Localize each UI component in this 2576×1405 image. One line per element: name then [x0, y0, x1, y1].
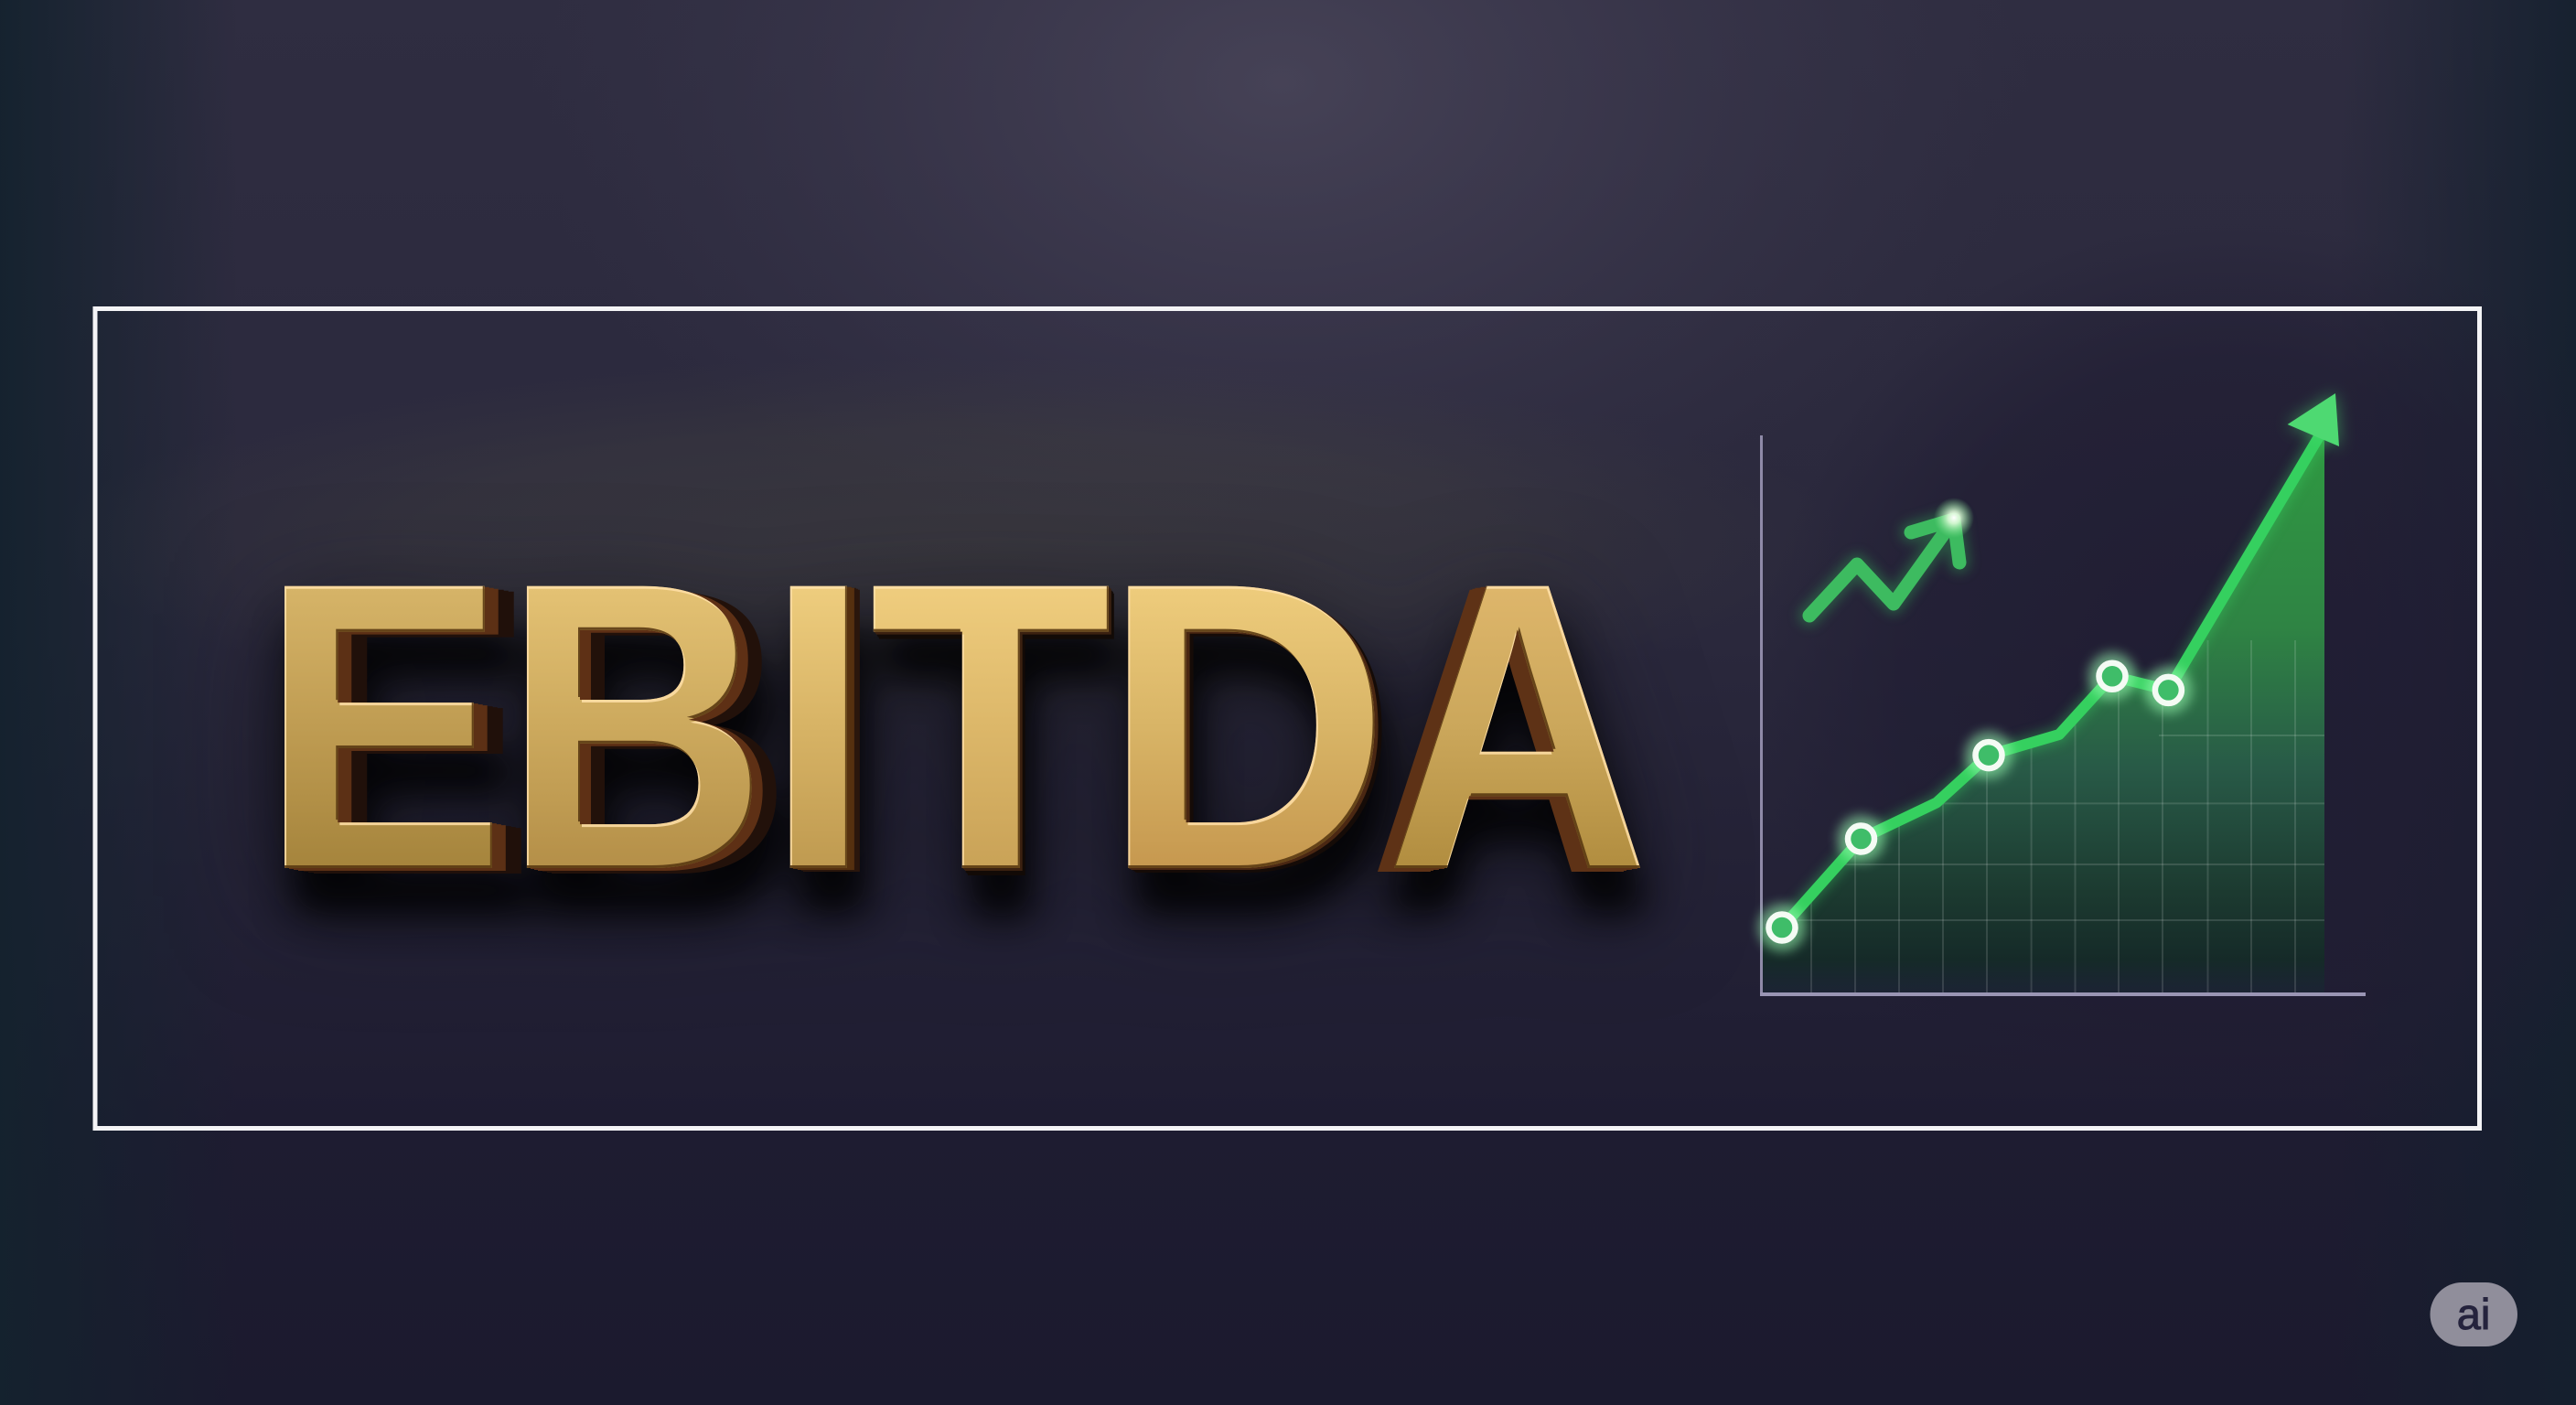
area fill under line [1763, 429, 2324, 994]
letter A: A [1385, 497, 1650, 955]
ai badge: ai [2457, 1290, 2490, 1338]
arrowhead [2288, 393, 2339, 446]
data point 1 [1758, 904, 1806, 951]
frame panel [95, 309, 2479, 1129]
data point 2 [1837, 815, 1884, 863]
data point 4 [2088, 652, 2136, 700]
growth line [1782, 429, 2324, 928]
chart grid [1782, 640, 2324, 994]
data point 3 [1965, 732, 2012, 779]
data point 5 [2144, 666, 2192, 713]
letter T: T [869, 497, 1112, 955]
y axis [1760, 435, 1763, 994]
growth chart [1758, 393, 2366, 994]
title: EBITDA [260, 497, 1650, 955]
letter D: D [1101, 497, 1391, 955]
letter B: B [502, 497, 768, 955]
letter E: E [260, 497, 507, 955]
icon: small trend arrow [1809, 498, 1974, 616]
line glow [1782, 429, 2324, 928]
ai badge [2430, 1282, 2517, 1346]
letter I: I [764, 497, 874, 955]
x axis [1760, 992, 2366, 996]
